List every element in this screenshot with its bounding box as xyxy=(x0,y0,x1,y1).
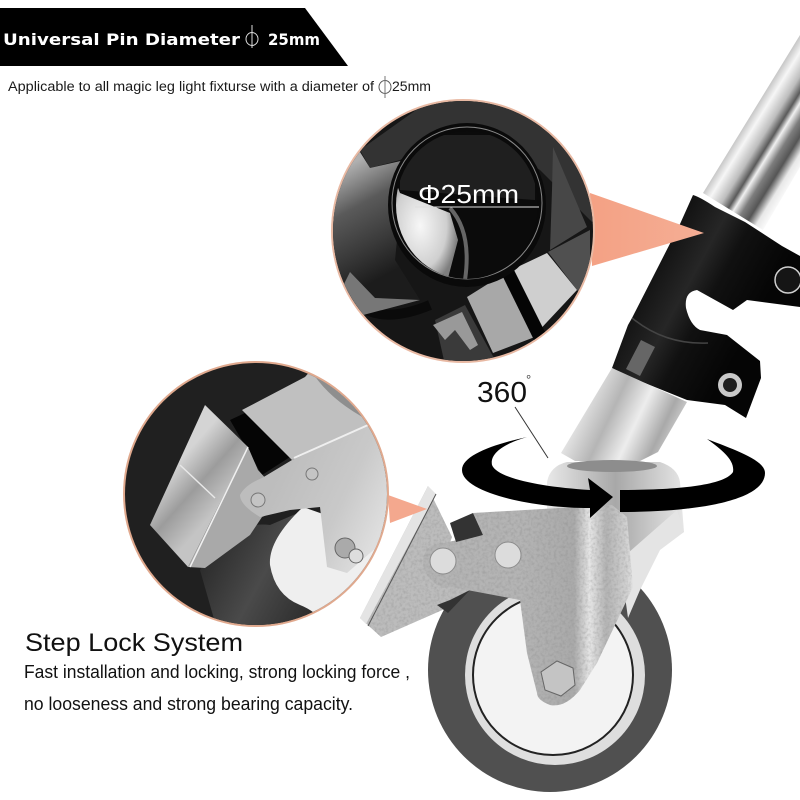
screws xyxy=(251,493,265,507)
brake pedal xyxy=(360,486,470,637)
rotation arrow xyxy=(462,437,765,518)
header banner: universal pin diameter: 25mm xyxy=(268,30,320,49)
arm, right side xyxy=(514,253,577,327)
subtitle: applicable fixtures xyxy=(8,76,431,98)
subtitle: applicable fixtures: 25mm xyxy=(392,79,431,94)
side plate xyxy=(240,425,400,573)
360 degree label: 360 xyxy=(477,377,527,409)
360 leader line xyxy=(515,407,548,458)
wheel rim xyxy=(465,585,645,765)
lower left black band xyxy=(345,290,430,315)
callout circle: 25mm clamp detail xyxy=(330,98,600,368)
callout circle: step lock detail xyxy=(123,361,389,627)
callout pointer: clamp xyxy=(590,193,704,266)
header banner: universal pin diameter: Universal Pin Diameter xyxy=(3,30,240,49)
caster wheel xyxy=(428,548,672,792)
white hub xyxy=(270,508,381,612)
caster fork xyxy=(423,505,633,705)
callout measurement: phi 25mm: Φ25mm xyxy=(418,179,519,209)
body text: locking description xyxy=(24,662,410,714)
body text: locking description: Fast installation and locking, strong locking force , xyxy=(24,662,410,682)
tyre xyxy=(428,548,672,792)
swivel dome xyxy=(547,460,684,618)
clamp screws xyxy=(718,267,800,397)
header banner: universal pin diameter xyxy=(0,8,348,66)
chrome pole xyxy=(703,35,800,230)
arm, black stripe xyxy=(503,270,545,340)
heading: step lock system: Step Lock System xyxy=(25,629,243,657)
aluminium tube xyxy=(561,368,687,461)
body text: locking description: no looseness and strong bearing capacity. xyxy=(24,694,353,714)
axle nut xyxy=(541,661,575,696)
pedal arm xyxy=(188,447,266,568)
pedal plate xyxy=(150,405,248,567)
fork rivets xyxy=(430,542,521,574)
360 degree label: ° xyxy=(526,372,531,387)
black clamp sleeve xyxy=(612,195,800,418)
nut xyxy=(335,538,355,558)
subtitle: applicable fixtures: Applicable to all magic leg light fixturse with a diameter of xyxy=(8,79,374,94)
light stand leg with clamp xyxy=(561,35,800,461)
callout pointer: brake xyxy=(388,495,427,523)
black gap xyxy=(230,413,290,475)
arm, left side xyxy=(467,278,533,353)
top plate xyxy=(242,374,368,460)
